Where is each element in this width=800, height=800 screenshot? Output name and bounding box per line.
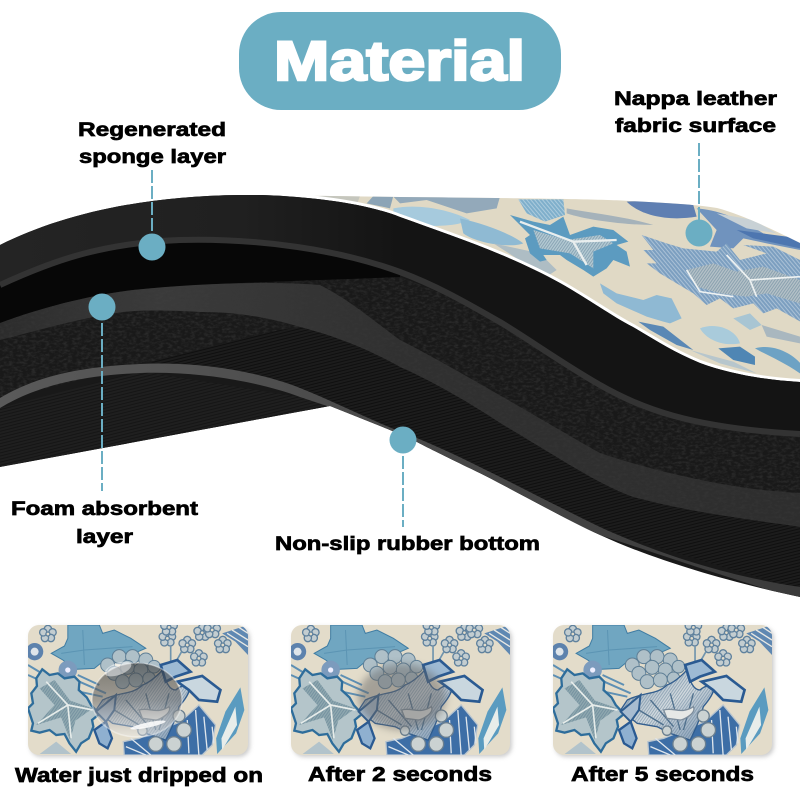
fading wet patch bbox=[358, 664, 446, 730]
dark gap bbox=[0, 240, 400, 323]
callout: rubber pointer bbox=[390, 426, 416, 527]
foam absorbent band bbox=[0, 283, 800, 527]
rubber edge strip bbox=[0, 364, 800, 600]
label: nappa leather fabric surface bbox=[614, 88, 778, 137]
label: non-slip rubber bottom: Non-slip rubber bottom bbox=[275, 533, 540, 555]
foam mottled texture bbox=[0, 278, 800, 493]
callout: sponge pointer bbox=[138, 170, 166, 260]
callout: foam pointer bbox=[88, 294, 116, 491]
label: nappa leather fabric surface: Nappa leather bbox=[614, 88, 778, 110]
label: regenerated sponge layer: sponge layer bbox=[79, 146, 226, 168]
label: regenerated sponge layer bbox=[78, 119, 226, 168]
label: foam absorbent layer bbox=[11, 498, 199, 548]
caption: After 5 seconds bbox=[571, 764, 754, 786]
label: nappa leather fabric surface: fabric surface bbox=[615, 115, 776, 137]
mat cross-section bbox=[0, 190, 800, 610]
sponge lower edge strip bbox=[0, 240, 800, 434]
mat body bbox=[0, 190, 800, 610]
top sponge layer bbox=[0, 195, 800, 382]
label: foam absorbent layer: Foam absorbent bbox=[11, 498, 199, 520]
label: foam absorbent layer: layer bbox=[76, 526, 134, 548]
panel: after 5 seconds bbox=[551, 619, 774, 786]
caption: Water just dripped on bbox=[15, 765, 263, 787]
caption: After 2 seconds bbox=[308, 764, 492, 786]
fabric surface layer bbox=[315, 196, 800, 379]
panel: water just dripped on bbox=[15, 619, 263, 787]
fabric white edge bbox=[262, 195, 800, 382]
title: Material bbox=[274, 29, 525, 92]
label: regenerated sponge layer: Regenerated bbox=[78, 119, 226, 141]
title bbox=[239, 12, 561, 110]
rubber texture bbox=[216, 330, 418, 442]
callout: fabric pointer bbox=[686, 143, 712, 246]
icon: water droplet bbox=[92, 659, 182, 737]
panel: after 2 seconds bbox=[289, 619, 512, 786]
